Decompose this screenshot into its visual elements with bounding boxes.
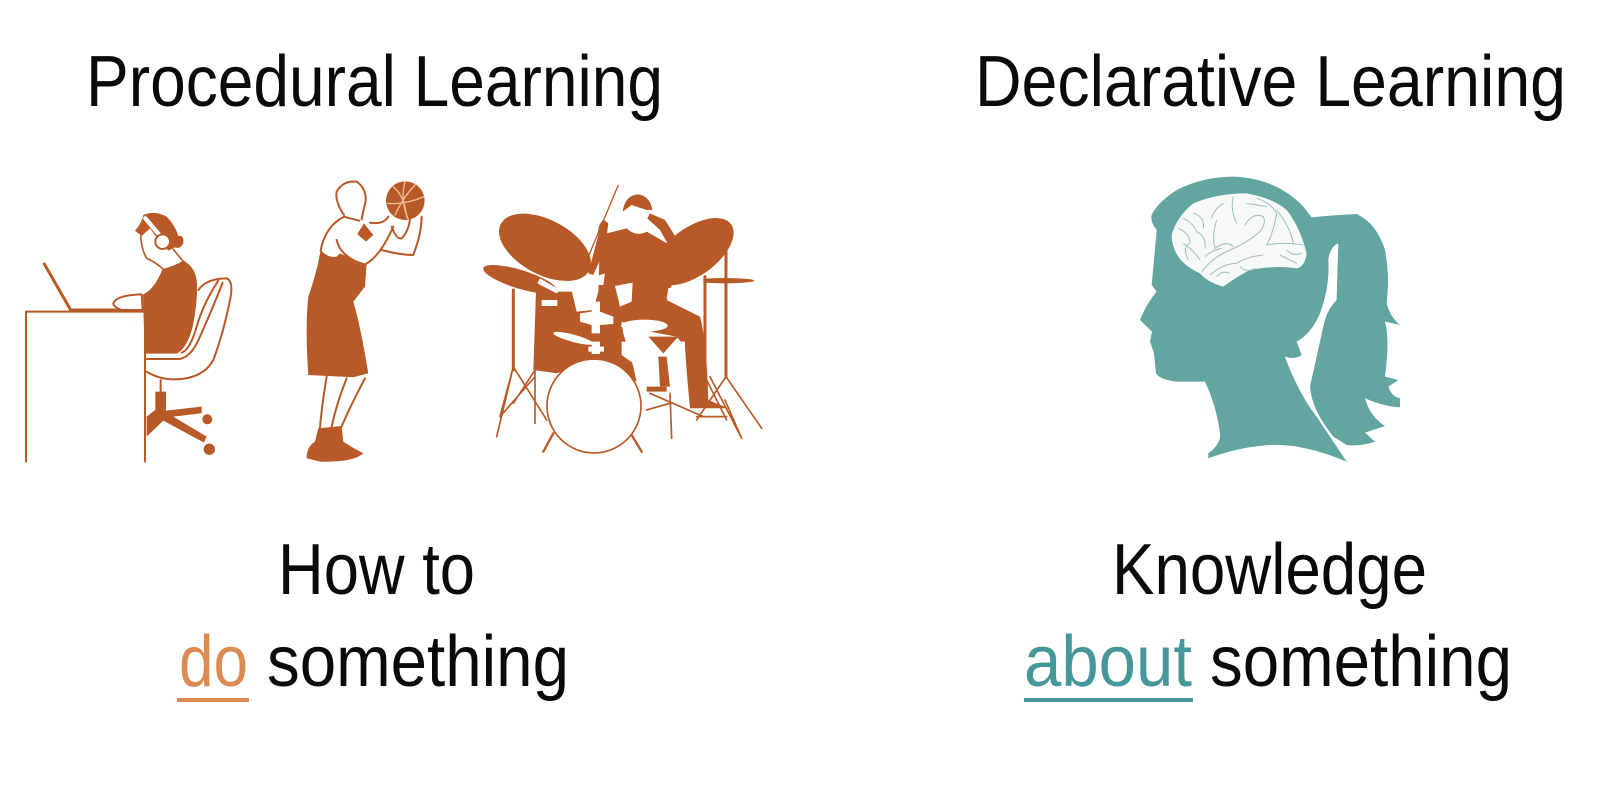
chair: [147, 278, 231, 379]
icon: basketball player: [307, 181, 425, 462]
drummer body: [598, 228, 728, 408]
bass drum: [547, 359, 641, 453]
stands: [497, 250, 762, 452]
shoes: [307, 426, 363, 462]
word: something: something: [1210, 622, 1512, 702]
word: about: about: [1024, 622, 1192, 702]
shirt: [144, 262, 196, 353]
face and neck: [141, 236, 183, 269]
cymbals: [488, 200, 602, 295]
word: do: do: [179, 622, 248, 702]
desk: [26, 312, 145, 462]
laptop: [44, 264, 122, 310]
text: do something: [177, 622, 569, 702]
legs: [320, 377, 365, 428]
head: [336, 181, 366, 219]
drum kit shell: [533, 292, 637, 382]
hand: [113, 294, 143, 310]
icon: drummer: [481, 185, 762, 453]
basketball: [386, 181, 425, 220]
text: knowledge: Knowledge: [1112, 530, 1427, 610]
underline: about: [1024, 698, 1193, 702]
hair: [135, 213, 183, 251]
brain: [1172, 193, 1307, 287]
stool: [648, 337, 678, 387]
raised arms and sticks: [588, 219, 608, 275]
underline: do: [177, 698, 249, 702]
shorts and jersey: [307, 250, 368, 377]
headphones: [145, 218, 159, 234]
jersey strap: [357, 223, 373, 242]
icon: head with brain: [1140, 177, 1400, 462]
word: something: something: [267, 622, 569, 702]
chair base: [158, 380, 164, 393]
cap: [623, 194, 652, 212]
text: about something: [1024, 622, 1512, 702]
shoulders and arms: [321, 217, 422, 264]
text: how to: How to: [278, 530, 475, 610]
brain folds: [1178, 197, 1303, 277]
head silhouette with ponytail: [1140, 177, 1400, 462]
icon: person at desk: [26, 213, 231, 462]
heading: procedural learning: Procedural Learning: [86, 42, 663, 122]
white cut-outs between kit parts: [537, 273, 703, 390]
